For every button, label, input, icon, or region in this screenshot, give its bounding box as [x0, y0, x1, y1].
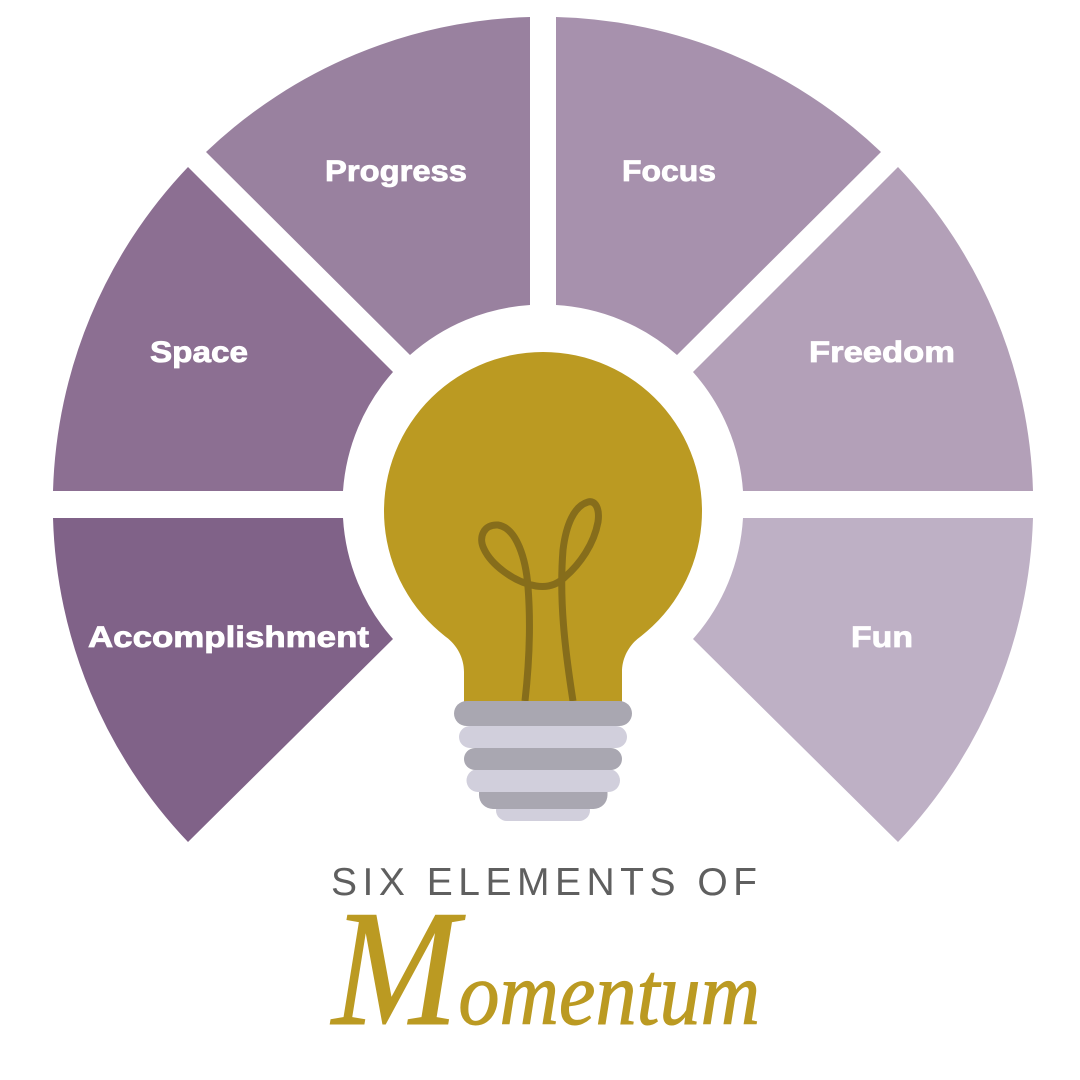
- segment: Progress: [206, 17, 530, 355]
- title: Momentum script: Momentum: [330, 876, 760, 1060]
- segment: Accomplishment: Accomplishment: [88, 621, 369, 654]
- segment: Accomplishment: [53, 518, 393, 842]
- segment: Space: [53, 167, 393, 491]
- screw base: [454, 701, 632, 821]
- icon: light bulb: [384, 352, 702, 821]
- segment: Freedom: [693, 167, 1033, 491]
- bulb glass: [384, 352, 702, 702]
- title: Six Elements of: SIX ELEMENTS OF: [331, 861, 757, 904]
- segment: Fun: [693, 518, 1033, 842]
- segment: Focus: Focus: [622, 155, 716, 188]
- segment: Focus: [556, 17, 881, 355]
- segment: Space: Space: [150, 336, 248, 369]
- segment: Progress: Progress: [325, 155, 467, 188]
- segment: Freedom: Freedom: [809, 336, 955, 369]
- segment: Fun: Fun: [851, 621, 913, 654]
- filament: [482, 502, 598, 701]
